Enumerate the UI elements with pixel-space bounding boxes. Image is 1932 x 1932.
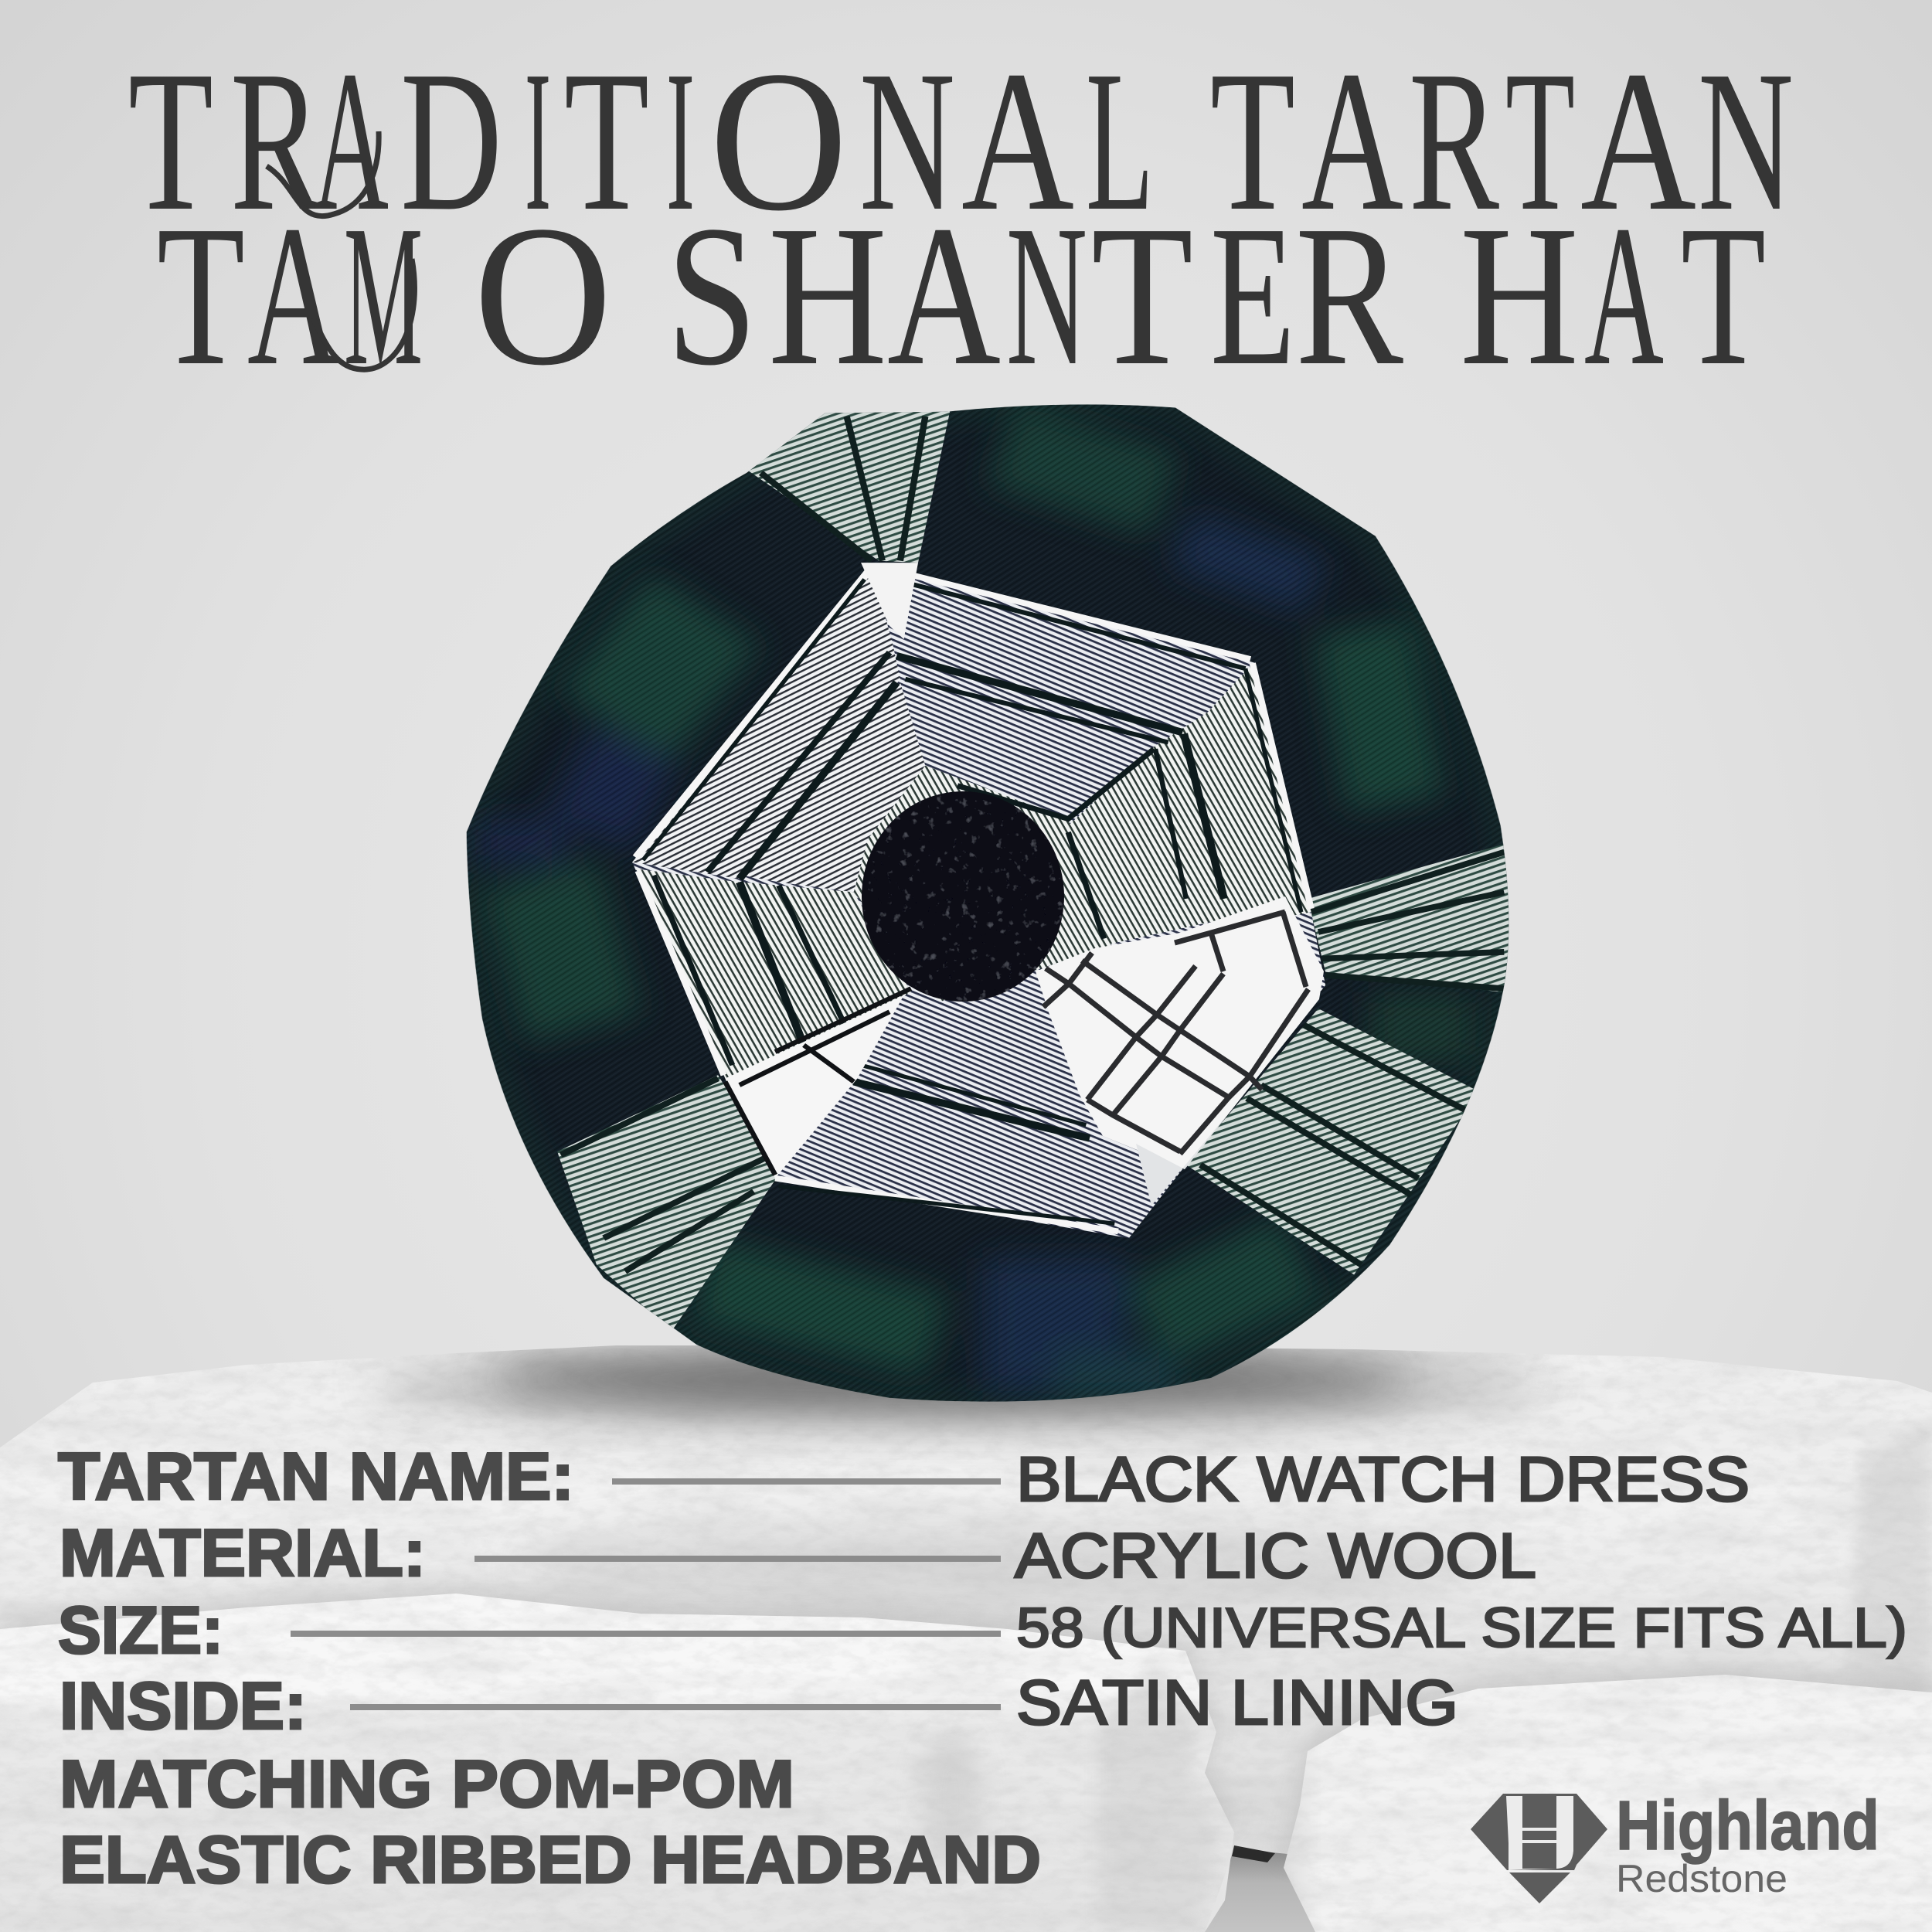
title line 1: R: [1409, 29, 1500, 253]
spec row: size: [58, 1594, 1907, 1668]
title line 1: A: [313, 29, 389, 253]
title line 2: N: [1006, 184, 1087, 407]
title line 2: H: [768, 184, 887, 407]
title line 1: A: [1580, 29, 1696, 253]
spec row: material: [60, 1516, 1536, 1591]
title line 2: E: [1210, 184, 1295, 407]
dark panel stripes: [643, 580, 1301, 1223]
title line 1: A: [961, 29, 1074, 253]
title swash flourishes: [267, 131, 414, 369]
white edge stripes: [636, 567, 1311, 1231]
centre panels behind pom-pom: [854, 766, 1111, 1002]
hat shadow: [371, 1345, 1546, 1422]
title line 1: N: [859, 29, 955, 253]
title line 1: I: [666, 29, 695, 253]
title line 1: T: [1505, 29, 1575, 253]
title line 2: M: [344, 184, 423, 407]
feature: matching pom-pom: MATCHING POM-POM: [60, 1747, 794, 1821]
title line 2: H: [1460, 184, 1579, 407]
spec row: inside: INSIDE:: [60, 1669, 307, 1743]
spec row: tartan name: TARTAN NAME:: [58, 1440, 574, 1514]
title line 2: S: [666, 184, 757, 407]
dark tartan crown: [467, 404, 1509, 1402]
feature: elastic ribbed headband: ELASTIC RIBBED HEADBAND: [60, 1823, 1041, 1897]
title line 1: L: [1086, 29, 1154, 253]
title line 2: A: [1584, 184, 1664, 407]
hat fabric: [467, 404, 1509, 1402]
lower left rock: [0, 1594, 1234, 1932]
lower right rock: [1284, 1675, 1932, 1932]
spec row: inside: SATIN LINING: [1016, 1668, 1458, 1738]
title line 1: A: [1301, 29, 1403, 253]
title line 2: A: [247, 184, 340, 407]
main rock: [0, 1345, 1932, 1870]
title line 1: T: [1210, 29, 1295, 253]
white corner knot: [861, 563, 918, 639]
title line 1: D: [400, 29, 502, 253]
logo wordmark: Redstone: Redstone: [1616, 1857, 1787, 1900]
title line 2: R: [1295, 184, 1404, 407]
rock contact shadows: [0, 1584, 1932, 1861]
title line 2: O: [474, 184, 612, 407]
white patch: lower left: [725, 988, 911, 1179]
title line 2: T: [157, 184, 245, 407]
title line 2: T: [1091, 184, 1193, 407]
title line 1: R: [230, 29, 322, 253]
logo wordmark: Highland: Highland: [1616, 1787, 1879, 1865]
title line 2: T: [1681, 184, 1766, 407]
white patch: lower right lattice: [1036, 896, 1324, 1206]
spec row: size: SIZE:: [58, 1594, 223, 1668]
spec row: material: MATERIAL:: [60, 1516, 426, 1590]
stone pedestal: [0, 1345, 1932, 1932]
pom-pom: [862, 791, 1064, 1002]
title: [128, 29, 1794, 407]
outer fold bands: [557, 410, 1512, 1332]
title line 2: A: [887, 184, 1001, 407]
spec row: inside: [60, 1668, 1458, 1743]
right band: [1308, 842, 1512, 993]
lower right band: [1186, 1009, 1479, 1274]
icon: diamond monogram: [1471, 1794, 1607, 1903]
spec row: tartan name: BLACK WATCH DRESS: [1016, 1444, 1750, 1515]
inner grey panels: [632, 566, 1325, 1238]
lower left band: [557, 1075, 779, 1332]
title line 1: T: [564, 29, 649, 253]
title line 1: O: [709, 29, 848, 253]
top band: [747, 410, 951, 563]
stone texture: [0, 1349, 1932, 1932]
logo: [1471, 1787, 1879, 1903]
spec row: material: ACRYLIC WOOL: [1015, 1521, 1536, 1591]
specification list: [58, 1440, 1907, 1897]
hat: [467, 404, 1509, 1402]
spec row: tartan name: [58, 1440, 1750, 1515]
floor gap: [1205, 1845, 1315, 1932]
title line 1: I: [525, 29, 551, 253]
title line 1: N: [1698, 29, 1794, 253]
spec row: size: 58 (UNIVERSAL SIZE FITS ALL): [1016, 1597, 1907, 1659]
title line 1: T: [128, 29, 213, 253]
